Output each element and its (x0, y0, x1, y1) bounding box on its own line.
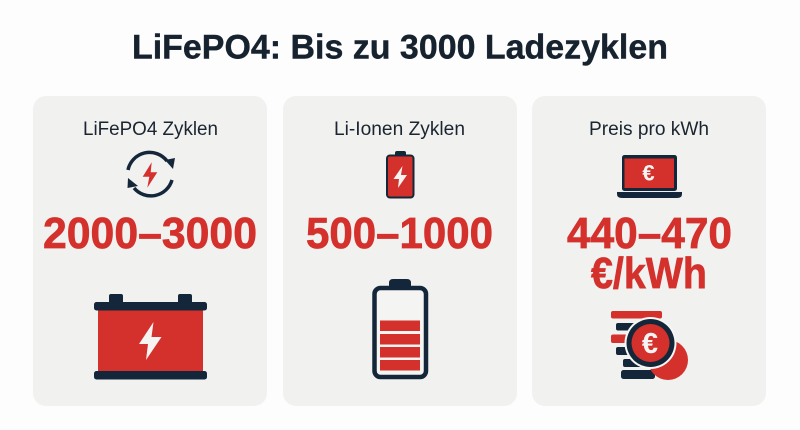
title: LiFePO4: Bis zu 3000 Ladezyklen (132, 28, 668, 66)
value: 2000–3000: 2000–3000 (43, 209, 257, 258)
icon: car battery (94, 294, 207, 380)
icon: coin stack: € (642, 328, 658, 360)
value: 440–470 €/kWh (567, 209, 732, 298)
panel: Li-Ionen cycles (283, 96, 517, 406)
value: 500–1000: 500–1000 (306, 209, 493, 258)
label: Preis pro kWh: Preis pro kWh (589, 119, 709, 140)
icon: small battery (387, 151, 414, 198)
icon: laptop with euro (617, 155, 682, 198)
icon: coin stack (611, 311, 688, 380)
panel: price per kWh (532, 96, 766, 406)
icon: charge cycle (128, 152, 175, 196)
label: Li-Ionen Zyklen: Li-Ionen Zyklen (334, 119, 465, 140)
label: LiFePO4 Zyklen: LiFePO4 Zyklen (83, 119, 218, 140)
icon: laptop with euro: € (642, 160, 655, 186)
value: 440–470 €/kWh: €/kWh (591, 249, 707, 298)
value: 440–470 €/kWh: 440–470 (567, 209, 732, 258)
panel: LiFePO4 cycles (33, 96, 267, 406)
icon: large battery level (374, 279, 426, 377)
